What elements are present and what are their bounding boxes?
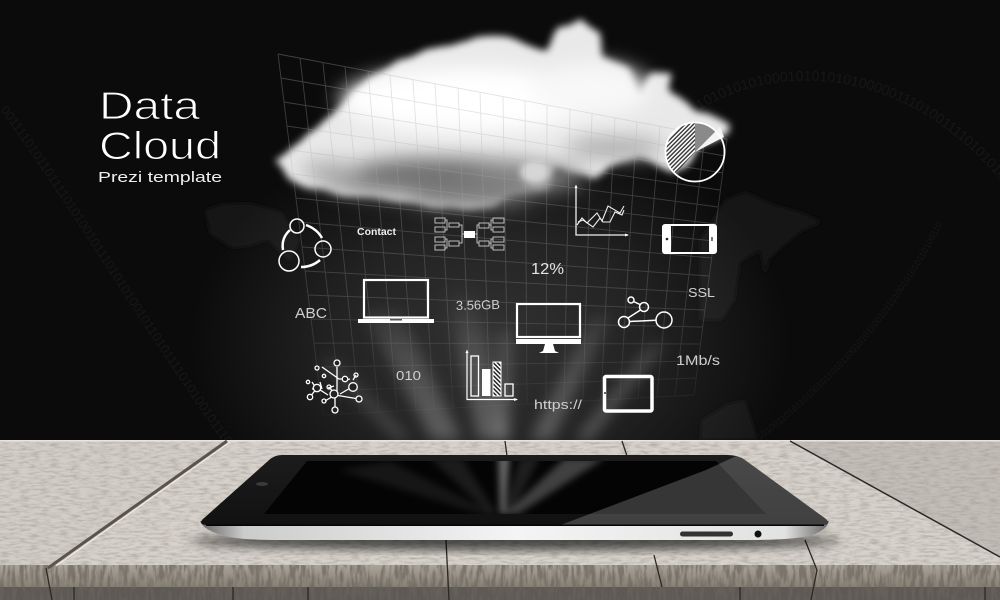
plank: right <box>790 441 1000 557</box>
icon: network graph <box>306 360 362 413</box>
icon: share nodes <box>618 297 672 328</box>
tablet shadow <box>190 532 840 550</box>
wood grain <box>0 441 1000 567</box>
cloud highlight <box>340 64 650 132</box>
label: SSL: SSL <box>688 285 715 300</box>
cloud underside <box>300 138 665 207</box>
label: 1Mb/s: 1Mb/s <box>676 353 720 368</box>
icon: tablet <box>604 376 652 411</box>
binary text arcs: 1010011010110100101101011001010110010110100101010110100110 <box>758 222 941 440</box>
label: 3.56GB: 3.56GB <box>456 297 500 313</box>
label: 12%: 12% <box>531 261 564 278</box>
table front face <box>0 565 1000 587</box>
plank seams <box>46 441 1000 600</box>
label: ABC: ABC <box>295 305 327 322</box>
icon: phone <box>663 225 716 253</box>
title block <box>98 85 222 186</box>
binary text arcs <box>2 71 1000 440</box>
headphone jack <box>754 530 762 538</box>
tablet screen <box>264 461 766 514</box>
light haze <box>180 150 800 441</box>
lower strip grain <box>0 587 1000 600</box>
front face grain <box>0 565 1000 587</box>
wooden table <box>0 440 1000 600</box>
screen light beams <box>349 461 604 514</box>
front camera <box>256 482 268 486</box>
icon: monitor <box>516 304 581 353</box>
cloud <box>276 18 730 207</box>
tablet silver edge <box>200 521 829 540</box>
icon: flow chart <box>435 218 504 250</box>
subtitle: Prezi template <box>98 170 222 186</box>
volume rocker <box>680 532 733 536</box>
world map silhouette <box>205 192 822 440</box>
screen gloss <box>562 456 828 525</box>
background <box>0 0 1000 441</box>
label: 010: 010 <box>396 368 421 383</box>
icon: bar chart <box>466 350 518 401</box>
title: Data <box>99 85 200 128</box>
label: https://: https:// <box>534 397 582 412</box>
table lower strip <box>0 587 1000 600</box>
plank: left <box>0 441 227 567</box>
icon: laptop <box>358 280 434 323</box>
title second line: Cloud <box>99 125 221 168</box>
icon: cycle diagram <box>279 219 331 271</box>
plank: middle <box>50 441 1000 567</box>
icon: pie chart <box>665 122 724 182</box>
light rays <box>318 285 665 440</box>
label: Contact: Contact <box>357 226 396 238</box>
tablet bezel <box>201 455 828 525</box>
tablet device <box>200 452 835 540</box>
cloud bright puff <box>520 160 550 184</box>
perspective grid <box>278 54 727 415</box>
icon: line chart <box>574 184 629 236</box>
